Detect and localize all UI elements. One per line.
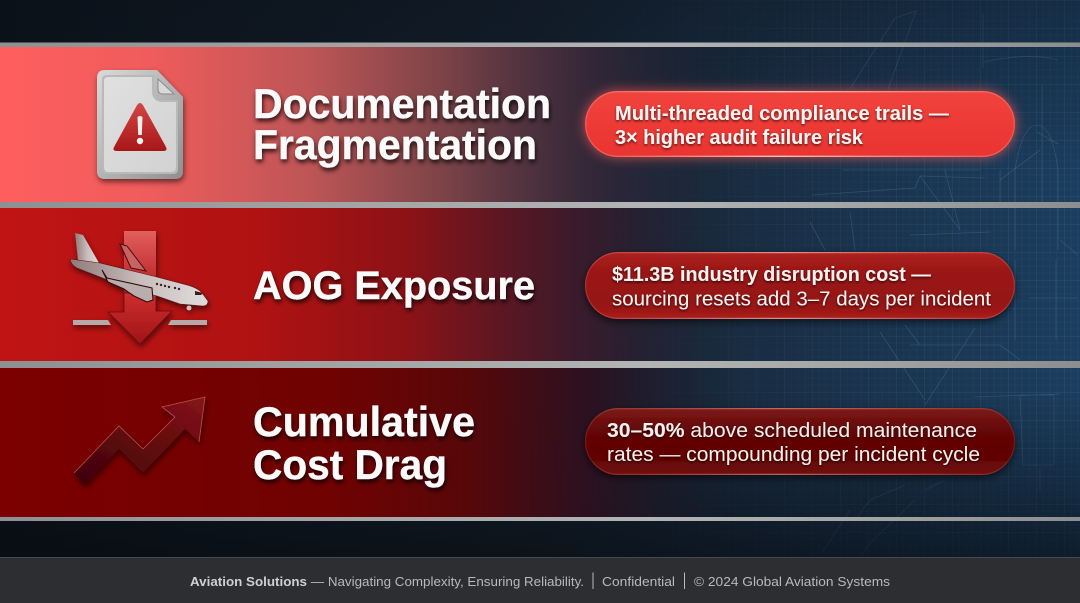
callout pill: 30–50% above scheduled maintenance <box>607 419 977 442</box>
callout pill <box>585 408 1015 475</box>
panel: documentation fragmentation <box>0 47 1015 202</box>
callout pill: rates — compounding per incident cycle <box>607 443 980 466</box>
heading <box>253 398 475 488</box>
heading: Documentation <box>253 80 551 127</box>
heading <box>253 80 551 168</box>
heading: Fragmentation <box>253 121 537 168</box>
panel: cumulative cost drag <box>0 368 1015 517</box>
row 3 background <box>0 368 740 517</box>
footer text <box>190 574 891 589</box>
warning triangle <box>113 103 167 151</box>
heading: AOG Exposure <box>253 264 535 308</box>
callout pill: sourcing resets add 3–7 days per incident <box>612 288 991 310</box>
icon: document with warning <box>97 70 183 179</box>
footer text: Aviation Solutions — Navigating Complexity, Ensuring Reliability. <box>190 574 584 589</box>
callout pill: 3× higher audit failure risk <box>615 127 864 149</box>
row 2 background <box>0 208 740 361</box>
panel: AOG exposure <box>0 208 1015 361</box>
callout pill: $11.3B industry disruption cost — <box>612 264 931 286</box>
footer text: Confidential <box>602 574 675 589</box>
footer text: © 2024 Global Aviation Systems <box>694 574 891 589</box>
heading: Cumulative <box>253 398 475 445</box>
callout pill <box>585 252 1015 319</box>
footer <box>0 557 1080 603</box>
icon: rising zigzag arrow <box>74 397 205 485</box>
heading: Cost Drag <box>253 441 447 488</box>
icon: plane with down arrow <box>70 231 208 344</box>
steel dividers <box>0 42 1080 521</box>
callout pill <box>585 91 1015 157</box>
callout pill: Multi-threaded compliance trails — <box>615 103 949 125</box>
row 1 background <box>0 47 740 202</box>
